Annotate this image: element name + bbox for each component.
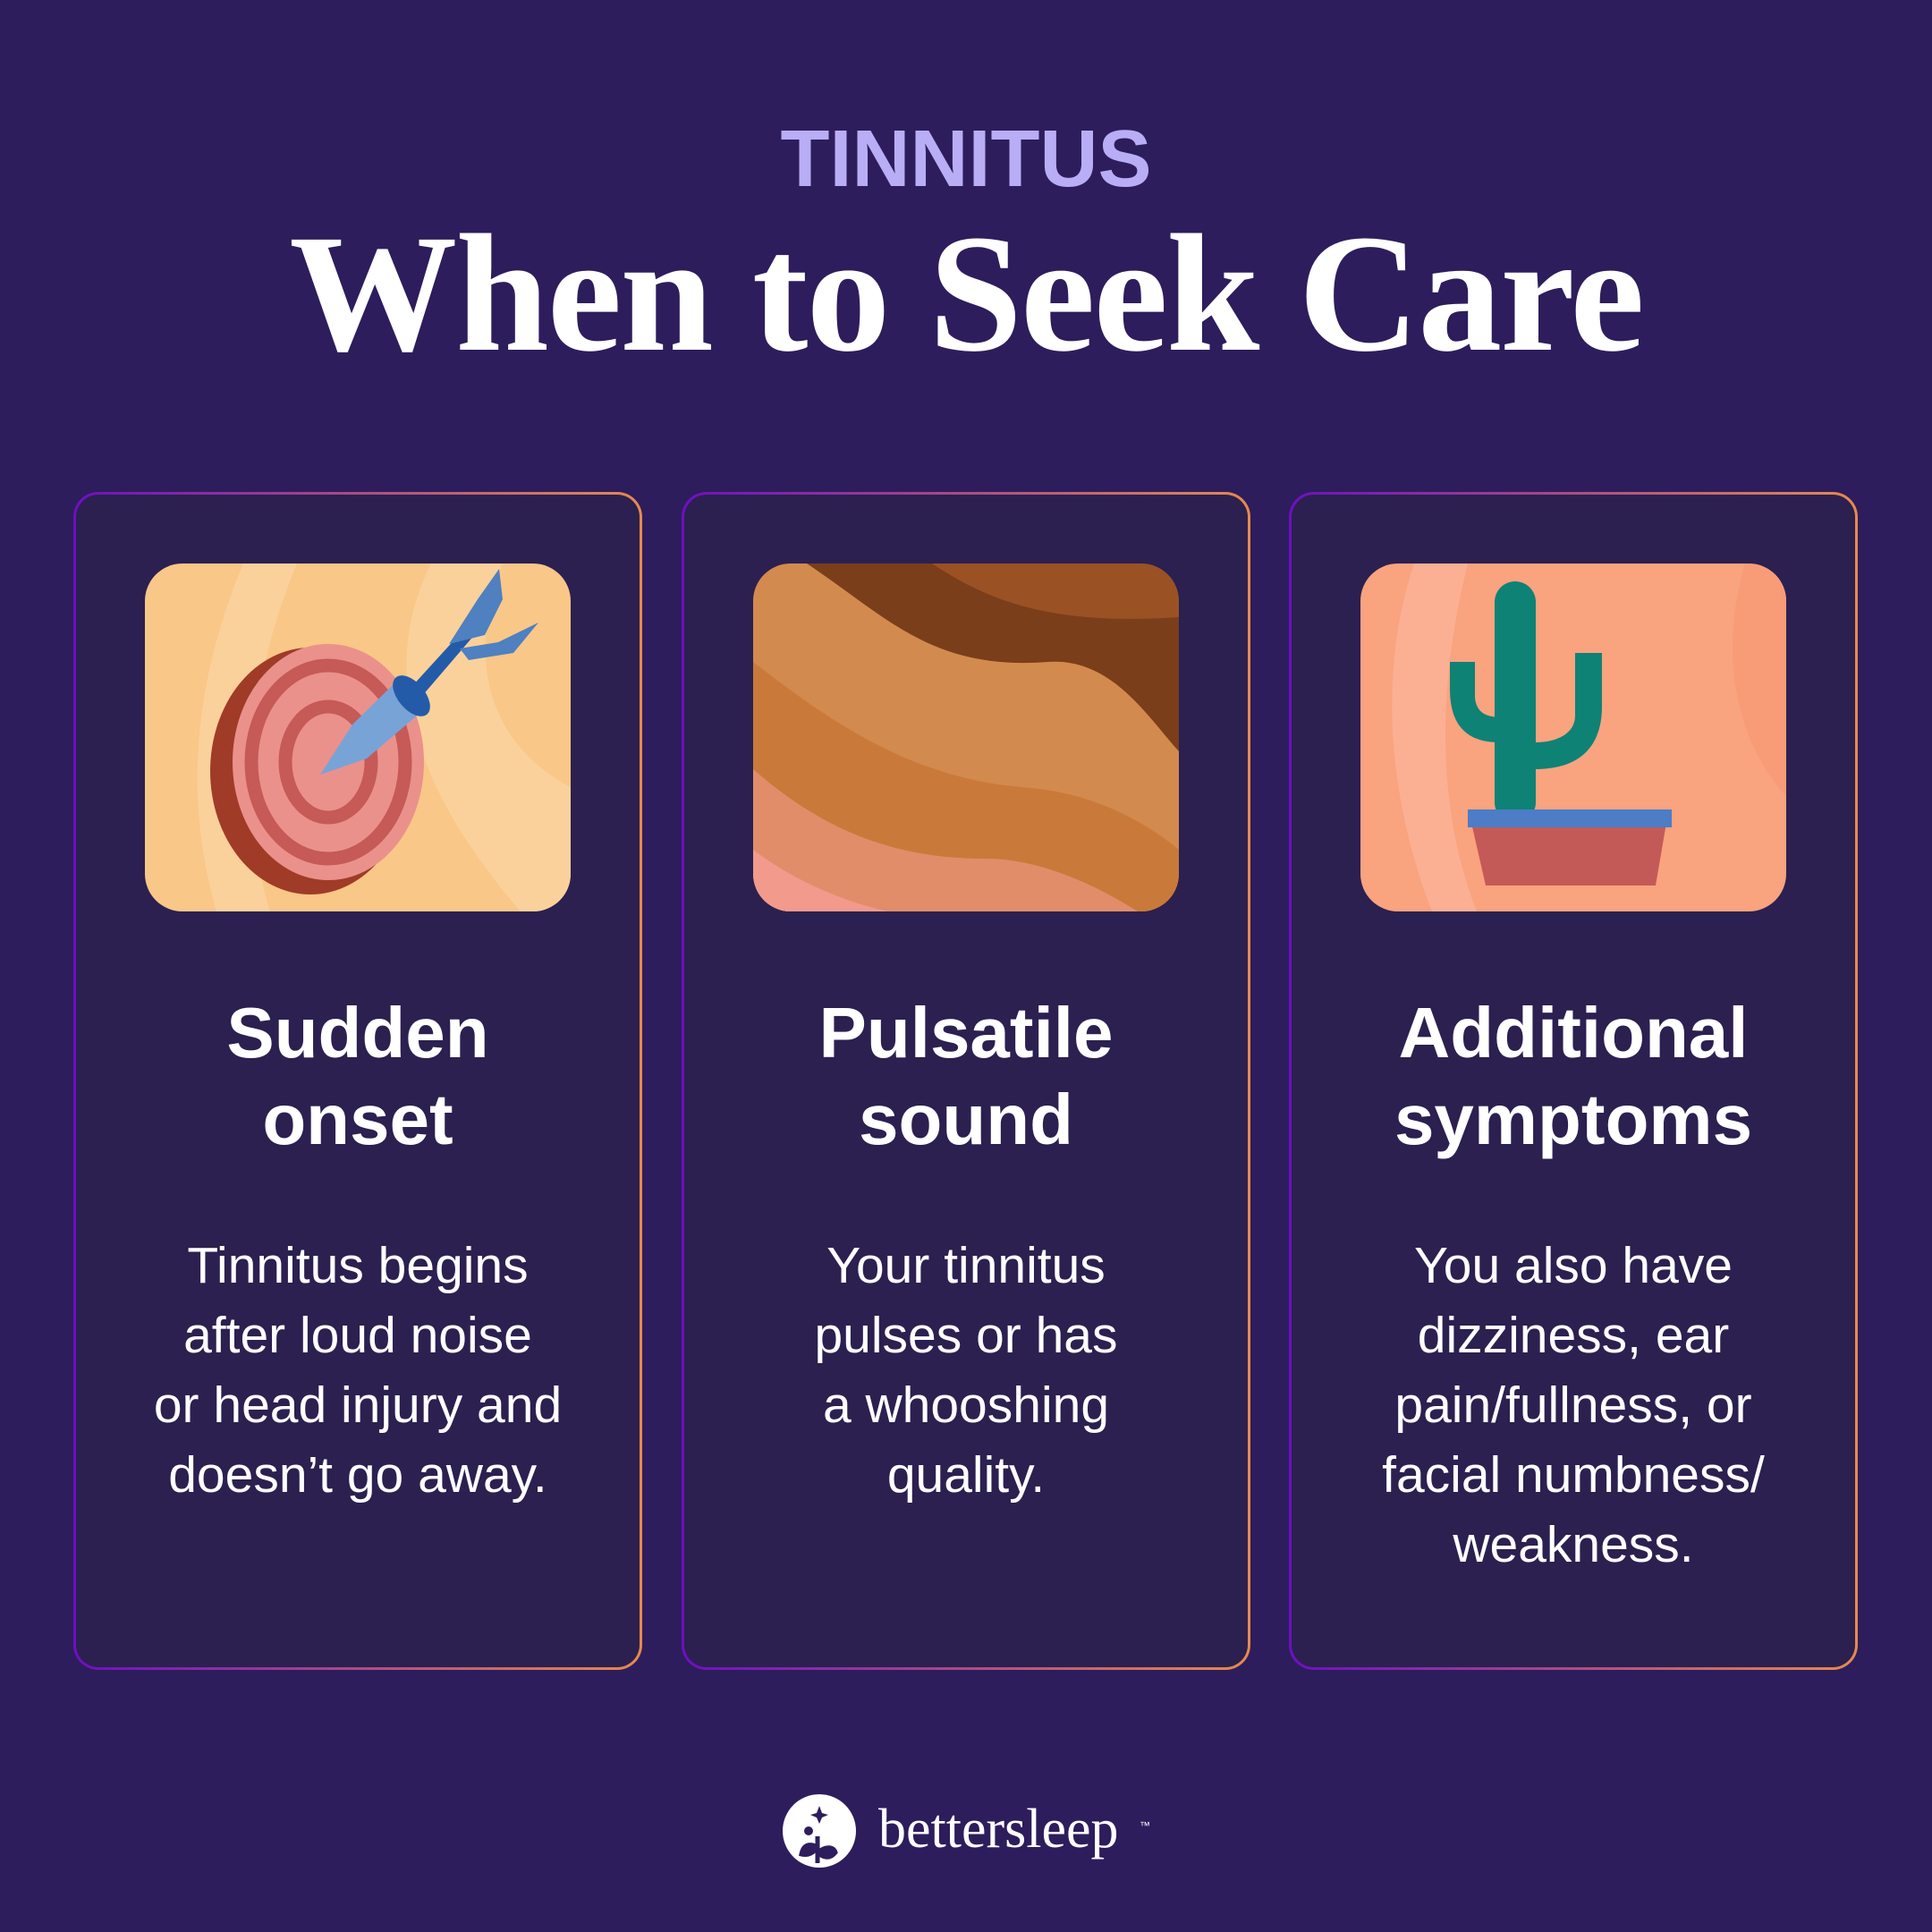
heading: [818, 993, 1114, 1159]
body text: or head injury and: [154, 1377, 562, 1434]
heading: [226, 993, 489, 1159]
body text: doesn’t go away.: [168, 1446, 547, 1504]
heading: [1394, 993, 1752, 1159]
body text: [154, 1237, 562, 1504]
heading: Additional: [1398, 993, 1749, 1072]
body text: quality.: [887, 1446, 1045, 1504]
kicker: TINNITUS: TINNITUS: [780, 114, 1151, 204]
heading: onset: [262, 1080, 453, 1159]
logo: bettersleep: [783, 1794, 1150, 1868]
body text: You also have: [1414, 1237, 1733, 1294]
title: When to Seek Care: [289, 199, 1643, 386]
body text: weakness.: [1453, 1516, 1694, 1573]
body text: [814, 1237, 1118, 1504]
body text: after loud noise: [183, 1307, 532, 1364]
heading: Sudden: [226, 993, 489, 1072]
logo: bettersleep: bettersleep: [878, 1799, 1119, 1860]
body text: [1382, 1237, 1765, 1573]
icon: cactus: [1360, 564, 1786, 911]
heading: Pulsatile: [818, 993, 1114, 1072]
body text: pain/fullness, or: [1394, 1377, 1752, 1434]
icon: waves: [753, 564, 1179, 911]
panel: additional symptoms: [1289, 492, 1858, 1670]
body text: a whooshing: [823, 1377, 1109, 1434]
icon: dartboard: [145, 564, 571, 911]
body text: Your tinnitus: [826, 1237, 1106, 1294]
heading: sound: [859, 1080, 1073, 1159]
body text: pulses or has: [814, 1307, 1118, 1364]
panel: sudden onset: [73, 492, 642, 1670]
body text: facial numbness/: [1382, 1446, 1765, 1504]
body text: Tinnitus begins: [187, 1237, 529, 1294]
logo: bettersleep: ™: [1140, 1819, 1150, 1832]
panel: pulsatile sound: [682, 492, 1250, 1670]
heading: symptoms: [1394, 1080, 1752, 1159]
body text: dizziness, ear: [1418, 1307, 1729, 1364]
